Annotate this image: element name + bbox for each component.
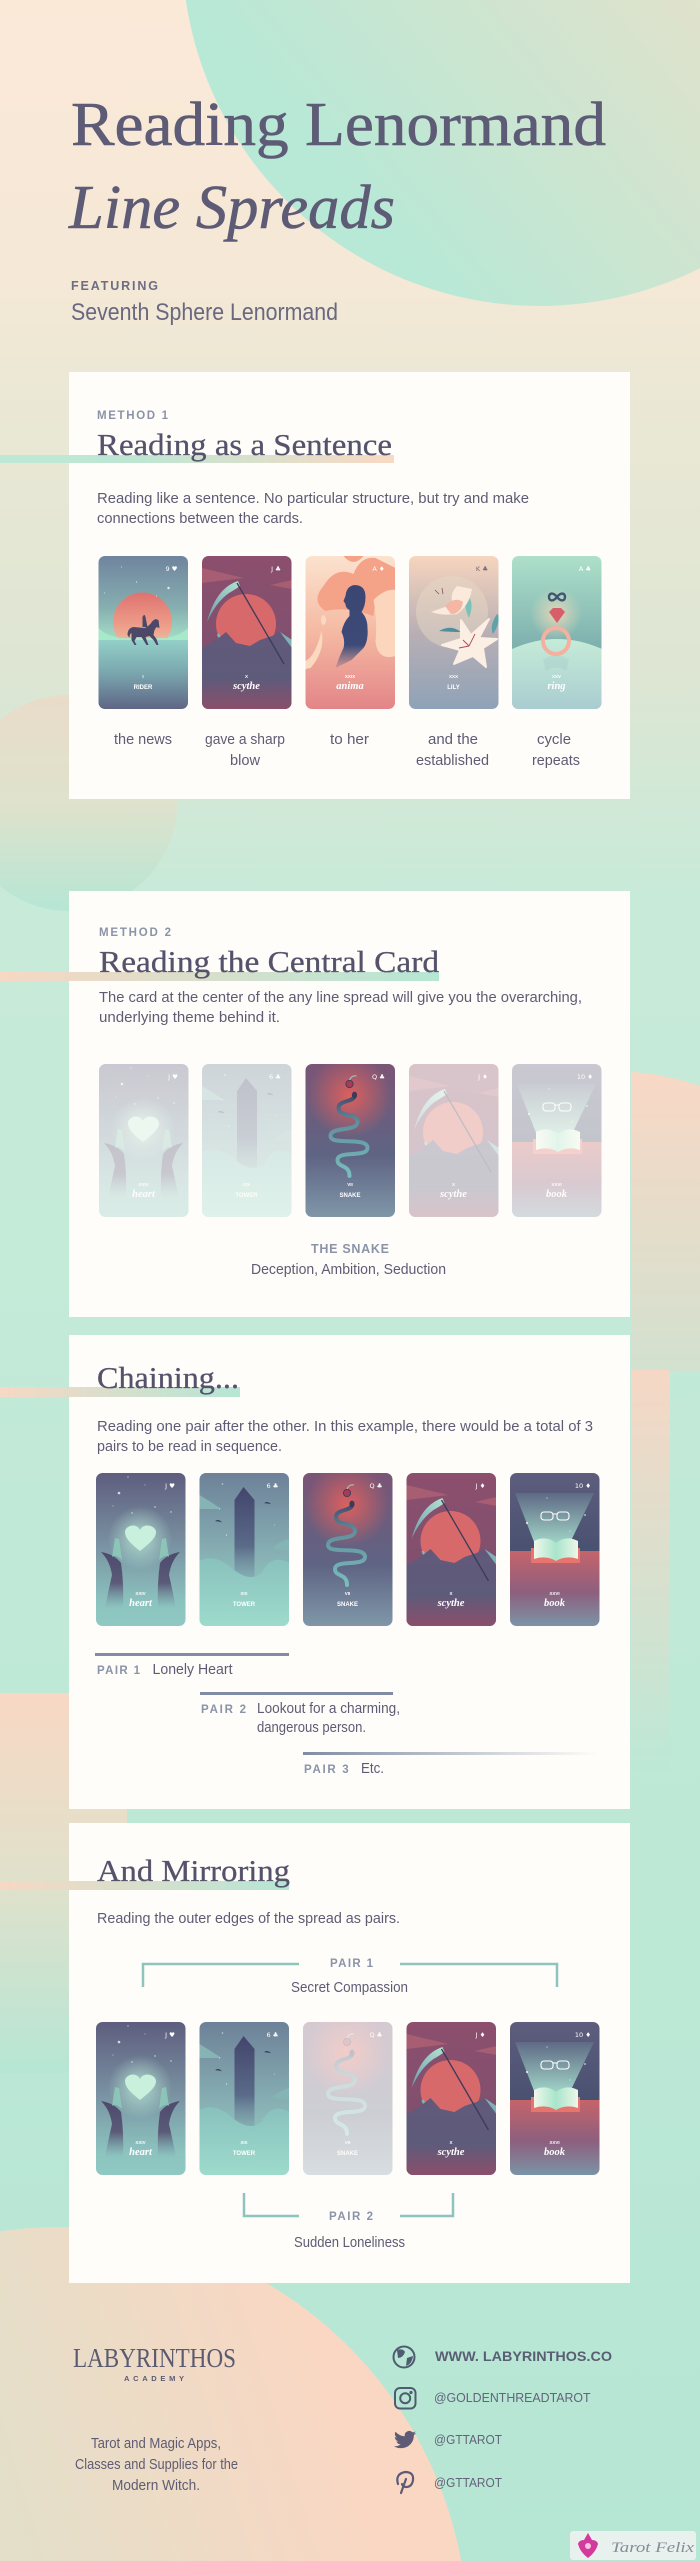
card: scythe (406, 1473, 496, 1626)
card captions: blow (230, 752, 260, 769)
bracket: pair 1: Secret Compassion (291, 1979, 408, 1996)
card: heart: XXIV (135, 1591, 146, 1596)
footer: tagline: Classes and Supplies for the (75, 2456, 238, 2473)
card: ring: ring (547, 681, 566, 692)
card: book faded: 10 ♦ (577, 1073, 593, 1081)
text: method 1 description: Reading like a sentence. No particular structure, but try and make (97, 490, 529, 507)
title (68, 91, 606, 242)
card: book: book (544, 1598, 566, 1609)
pair 2: dangerous person. (257, 1719, 366, 1736)
card: snake faded (303, 2012, 393, 2175)
card: rider: RIDER (134, 685, 153, 691)
card: heart: J ♥ (164, 1482, 175, 1490)
subtitle: featuring: FEATURING (71, 279, 158, 293)
text: mirroring description: Reading the outer edges of the spread as pairs. (97, 1910, 400, 1927)
card: snake faded: Q ♣ (369, 2031, 383, 2039)
card: ring (512, 556, 602, 709)
heading: method 2: METHOD 2 (99, 927, 171, 939)
card: lily: XXX (449, 674, 458, 679)
card: scythe: J ♣ (270, 565, 281, 573)
card: heart (96, 1473, 186, 1626)
card captions: cycle (537, 731, 571, 748)
heading: method 1 (0, 410, 394, 463)
subtitle: featuring: Seventh Sphere Lenormand (71, 299, 338, 326)
card: snake: Q ♣ (369, 1482, 383, 1490)
text: method 2 description: The card at the center of the any line spread will give you the overarching, (99, 989, 582, 1006)
text: method 1 description (97, 490, 529, 527)
heading: mirroring (0, 1853, 290, 1890)
watermark: tarot felix: Tarot Felix (611, 2540, 694, 2556)
pair 3: PAIR 3 (304, 1764, 349, 1776)
card: scythe: scythe (437, 2147, 465, 2158)
card: heart faded: heart (132, 1189, 156, 1200)
card: tower: TOWER (233, 1602, 256, 1608)
card: book faded: XXVI (551, 1182, 562, 1187)
card: lily: K ♣ (476, 565, 488, 573)
footer: tagline: Modern Witch. (112, 2477, 200, 2494)
bracket: pair 2: Sudden Loneliness (294, 2234, 405, 2251)
card: scythe (202, 556, 292, 709)
card: snake highlighted: Q ♣ (372, 1073, 385, 1081)
text: chaining description: pairs to be read in sequence. (97, 1438, 282, 1455)
heading: chaining: Chaining... (97, 1360, 239, 1395)
text: method 1 description: connections between the cards. (97, 510, 303, 527)
text: chaining description (97, 1418, 593, 1455)
heading: mirroring: And Mirroring (97, 1853, 290, 1888)
pair 2 (200, 1692, 400, 1736)
pair 2: Lookout for a charming, (257, 1700, 400, 1717)
card: scythe: X (245, 674, 248, 679)
pair 2: PAIR 2 (201, 1704, 246, 1716)
card: snake faded: SNAKE (337, 2151, 358, 2157)
card: scythe: J ♦ (475, 2031, 485, 2039)
panel: method 2 (0, 891, 630, 1317)
card: ring: A ♣ (579, 565, 591, 573)
card: scythe faded (409, 1064, 499, 1217)
card: book (510, 2022, 600, 2175)
card: snake (303, 1463, 393, 1626)
bracket: pair 2: PAIR 2 (329, 2211, 373, 2223)
card: tower: XIX (240, 1591, 248, 1596)
card: tower: XIX (240, 2140, 248, 2145)
pair 3: Etc. (361, 1760, 384, 1777)
card: snake highlighted: VII (347, 1182, 353, 1187)
card: scythe: scythe (232, 681, 260, 692)
panel: chaining (0, 1335, 630, 1809)
pair 1: Lonely Heart (152, 1661, 233, 1678)
card: anima: XXIX (345, 674, 355, 679)
icon: instagram (395, 2388, 416, 2408)
card: tower: TOWER (233, 2151, 256, 2157)
card: scythe faded: J ♦ (477, 1073, 488, 1081)
card: book faded: book (546, 1189, 568, 1200)
card: lily (409, 556, 499, 709)
heading: method 2: Reading the Central Card (99, 944, 440, 979)
card: book: XXVI (549, 2140, 560, 2145)
card: anima: A ♦ (372, 565, 385, 573)
card captions: established (416, 752, 489, 769)
footer: tagline: Tarot and Magic Apps, (91, 2435, 221, 2452)
card: tower (200, 2022, 290, 2175)
panel: mirroring (0, 1823, 630, 2283)
card captions (114, 731, 580, 769)
card: scythe (406, 2022, 496, 2175)
footer: tagline (75, 2435, 238, 2494)
central card meaning: THE SNAKE (311, 1242, 389, 1256)
link: pinterest: @GTTAROT (434, 2475, 502, 2490)
card: scythe: J ♦ (475, 1482, 485, 1490)
card: tower: 6 ♣ (266, 2031, 279, 2039)
card: tower faded (202, 1064, 292, 1217)
pair 3 (303, 1752, 599, 1777)
card captions: to her (330, 731, 369, 748)
card: snake: SNAKE (337, 1602, 358, 1608)
footer: logo: LABYRINTHOS (73, 2343, 236, 2373)
card: tower faded: XIX (243, 1182, 250, 1187)
card: heart faded: XXIV (138, 1182, 149, 1187)
card: scythe: X (449, 1591, 453, 1596)
link: instagram: @GOLDENTHREADTAROT (434, 2390, 591, 2405)
card: scythe faded: scythe (439, 1189, 467, 1200)
card captions: repeats (532, 752, 580, 769)
card: heart: XXIV (135, 2140, 146, 2145)
card: book: 10 ♦ (575, 1482, 591, 1490)
title: Line Spreads (68, 174, 395, 242)
bracket: pair 1 (143, 1958, 557, 1996)
central card meaning: Deception, Ambition, Seduction (251, 1261, 446, 1278)
card: snake highlighted: SNAKE (339, 1193, 361, 1199)
card: scythe: X (449, 2140, 453, 2145)
card: heart: heart (129, 1598, 153, 1609)
card: tower: 6 ♣ (266, 1482, 279, 1490)
card: heart faded: J ♥ (167, 1073, 178, 1081)
text: method 2 description: underlying theme behind it. (99, 1009, 280, 1026)
footer: logo (73, 2343, 236, 2383)
link: website: WWW. LABYRINTHOS.CO (435, 2349, 612, 2364)
card: rider: 9 ♥ (165, 565, 178, 573)
card: anima: anima (336, 681, 364, 692)
subtitle: featuring (71, 279, 338, 326)
text: chaining description: Reading one pair after the other. In this example, there would be a total of 3 (97, 1418, 593, 1435)
icon: pinterest (397, 2472, 413, 2493)
card: anima (306, 556, 396, 709)
card: scythe faded: X (452, 1182, 455, 1187)
card: heart: heart (129, 2147, 153, 2158)
card: heart: J ♥ (164, 2031, 175, 2039)
footer: logo: ACADEMY (124, 2374, 184, 2383)
card: snake faded: VII (345, 2140, 350, 2145)
card: heart faded (99, 1064, 189, 1217)
card: tower (200, 1473, 290, 1626)
card: book faded (512, 1064, 602, 1217)
card: book: 10 ♦ (575, 2031, 591, 2039)
title: Reading Lenormand (71, 91, 606, 159)
card: snake highlighted (306, 1054, 396, 1217)
card captions: gave a sharp (205, 731, 285, 748)
card: tower faded: 6 ♣ (269, 1073, 281, 1081)
card: book: book (544, 2147, 566, 2158)
panel: method 1 (0, 372, 630, 799)
heading: chaining (0, 1360, 240, 1397)
pair 1 (95, 1653, 289, 1678)
card: ring: XXV (552, 674, 561, 679)
pair 1: PAIR 1 (97, 1665, 141, 1677)
watermark: tarot felix (570, 2531, 696, 2560)
card: lily: LILY (447, 685, 460, 691)
heading: method 2 (0, 927, 440, 981)
card captions: and the (428, 731, 478, 748)
card: book (510, 1473, 600, 1626)
card: tower faded: TOWER (235, 1193, 258, 1199)
icon: globe (394, 2346, 414, 2368)
card: rider (98, 556, 188, 709)
card captions: the news (114, 731, 172, 748)
card: heart (96, 2022, 186, 2175)
central card meaning (251, 1242, 446, 1278)
heading: method 1: METHOD 1 (97, 410, 169, 422)
card: snake: VII (345, 1591, 350, 1596)
heading: method 1: Reading as a Sentence (97, 427, 392, 462)
text: method 2 description (99, 989, 582, 1026)
bracket: pair 2 (244, 2193, 453, 2251)
card: rider: I (142, 674, 144, 679)
link: twitter: @GTTAROT (434, 2432, 502, 2447)
icon: twitter (394, 2431, 416, 2448)
card: book: XXVI (549, 1591, 560, 1596)
card: scythe: scythe (437, 1598, 465, 1609)
bracket: pair 1: PAIR 1 (330, 1958, 374, 1970)
